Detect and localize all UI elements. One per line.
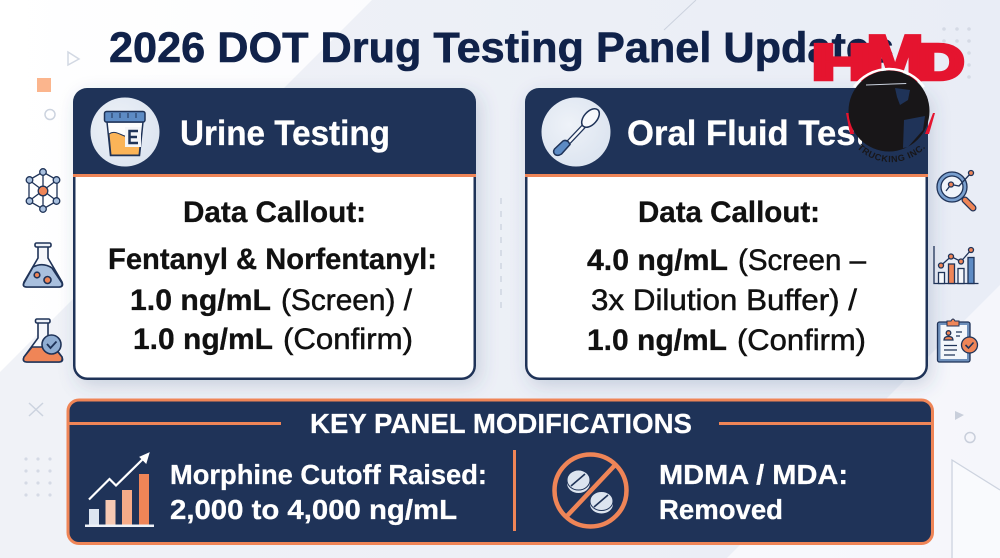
logo wordmark: D (918, 36, 964, 90)
urine panel data callout: Fentanyl & Norfentanyl: (108, 243, 437, 276)
oral panel data callout: 4.0 ng/mL (587, 244, 728, 277)
MDMA text (659, 459, 848, 525)
oral panel heading: Oral Fluid Testing (627, 114, 919, 153)
oral panel data callout: (Screen – (738, 244, 866, 277)
logo globe (848, 70, 930, 152)
decoration: dot grid lower left (24, 457, 52, 497)
icon: flask with blue liquid (23, 243, 63, 287)
urine panel data callout: 1.0 ng/mL (133, 323, 273, 356)
icon: flask with check (23, 319, 63, 362)
logo: HMD Trucking Inc (812, 22, 964, 162)
morphine text: Morphine Cutoff Raised: (170, 459, 487, 490)
decoration: small grey triangle (955, 411, 964, 420)
oral panel data callout (587, 196, 866, 357)
decoration: outline triangle (68, 52, 79, 65)
logo red side marks (846, 113, 935, 134)
decoration: dot grid upper right (942, 27, 971, 79)
logo tagline: TRUCKING INC. (858, 144, 925, 162)
MDMA text: Removed (659, 494, 783, 525)
oral panel data callout: (Confirm) (737, 324, 866, 357)
oral panel data callout: 3x Dilution Buffer) / (591, 284, 858, 317)
oral panel data callout: Data Callout: (638, 196, 820, 229)
urine panel data callout: 1.0 ng/mL (130, 284, 271, 317)
oral panel header (525, 88, 928, 175)
urine panel heading: Urine Testing (180, 114, 390, 153)
morphine text: 2,000 to 4,000 ng/mL (170, 494, 457, 525)
MDMA text: MDMA / MDA: (659, 459, 848, 490)
logo white arc (854, 69, 924, 87)
icon: urine sample cup (90, 98, 160, 166)
section heading: KEY PANEL MODIFICATIONS (310, 408, 692, 439)
icon: magnifier with trend (937, 170, 974, 208)
panel: key panel modifications (68, 400, 932, 544)
decoration: ring lower right (965, 432, 975, 442)
logo wordmark (812, 22, 964, 94)
logo wordmark: M (866, 22, 924, 94)
decoration: ring (45, 110, 55, 120)
icon: clipboard with check (938, 319, 978, 362)
urine panel data callout: Data Callout: (183, 196, 366, 229)
urine panel data callout: (Confirm) (283, 323, 413, 356)
icon: bar and line chart (934, 246, 978, 284)
morphine text (170, 459, 487, 525)
panel: urine testing (73, 88, 476, 380)
urine panel data callout: (Screen) / (281, 284, 413, 317)
logo wordmark: H (812, 36, 872, 90)
decoration: orange square (37, 78, 51, 92)
oral panel data callout: 1.0 ng/mL (587, 324, 727, 357)
panel: oral fluid testing (525, 88, 928, 380)
urine panel data callout (108, 196, 437, 356)
icon: molecule network (26, 169, 60, 212)
icon: oral swab (542, 98, 610, 166)
urine panel header (73, 88, 476, 175)
decoration: cross (29, 403, 43, 416)
title: 2026 DOT Drug Testing Panel Updates (109, 24, 894, 72)
icon: pills prohibited (554, 454, 626, 526)
icon: rising bar chart (85, 453, 154, 527)
